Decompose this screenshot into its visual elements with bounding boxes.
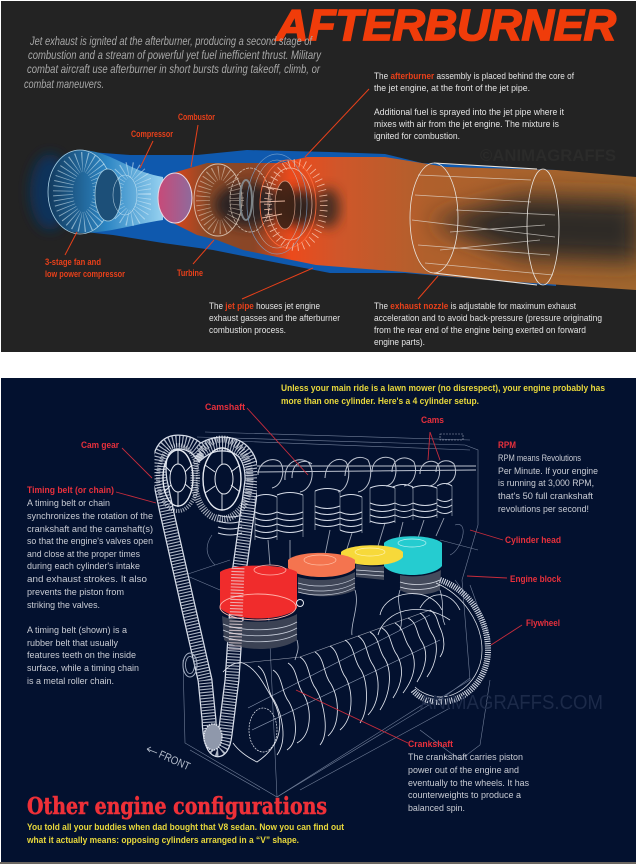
- callout: RPM: that's 50 full crankshaft: [498, 491, 593, 502]
- callout: exhaust nozzle: engine parts).: [374, 337, 425, 348]
- callout: RPM: RPM means Revolutions: [498, 453, 581, 464]
- callout: timing belt: [27, 485, 156, 687]
- cyan piston: [384, 536, 442, 594]
- camshaft: [257, 457, 476, 492]
- closing text: what it actually means: opposing cylinders arranged in a “V” shape.: [26, 835, 299, 846]
- label: cylinder head: [470, 530, 561, 546]
- callout: timing belt: crankshaft and the camshaft(s): [27, 524, 153, 535]
- engine block wireframe: [183, 432, 490, 797]
- crankshaft: [223, 610, 444, 762]
- lower pulley: [204, 724, 222, 750]
- label: engine block: Engine block: [510, 574, 562, 585]
- callout: timing belt: striking the valves.: [27, 600, 100, 611]
- callout: crankshaft: counterweights to produce a: [408, 790, 522, 801]
- callout: RPM: revolutions per second!: [498, 504, 589, 515]
- watermark: ©ANIMAGRAFFS: [480, 146, 616, 165]
- closing text: You told all your buddies when dad bought that V8 sedan. Now you can find out: [27, 822, 345, 833]
- callout: timing belt: is a metal roller chain.: [27, 676, 114, 687]
- intro text: [281, 383, 605, 407]
- orange piston: [288, 553, 355, 596]
- callout: exhaust nozzle: from the rear end of the engine being exerted on forward: [374, 325, 586, 336]
- blue jet pipe: [85, 150, 556, 286]
- flame: [173, 157, 636, 290]
- callout: exhaust nozzle: [374, 276, 602, 348]
- dark core of exhaust: [430, 196, 636, 262]
- label: camshaft: Camshaft: [205, 402, 246, 413]
- callout: timing belt: prevents the piston from: [27, 587, 124, 598]
- cam lobes: [258, 457, 456, 492]
- label: cylinder head: Cylinder head: [505, 535, 561, 546]
- panel: afterburner: [1, 1, 636, 352]
- callout: timing belt: A timing belt (shown) is a: [27, 625, 128, 636]
- label: flywheel: Flywheel: [526, 618, 560, 629]
- label: cam gear: [81, 440, 152, 478]
- intro text: combat aircraft use afterburner in short bursts during takeoff, climb, or: [27, 62, 321, 76]
- intro text: more than one cylinder. Here's a 4 cylinder setup.: [281, 396, 479, 407]
- label: cams: [421, 415, 444, 460]
- cam gears: [158, 439, 250, 519]
- callout: timing belt: A timing belt or chain: [27, 498, 110, 509]
- label: compressor: Compressor: [131, 129, 173, 139]
- callout: jet pipe: [209, 268, 340, 336]
- label: fan: 3-stage fan and: [45, 257, 101, 267]
- callout: exhaust nozzle: acceleration and to avoid back-pressure (pressure originating: [374, 313, 602, 324]
- intro text: combustion and a stream of powerful yet fuel inefficient thrust. Military: [28, 48, 322, 62]
- red piston: [220, 565, 304, 650]
- callout: jet pipe: The jet pipe houses jet engine: [209, 301, 320, 312]
- label: engine block: [467, 574, 562, 585]
- label: fan: [45, 232, 125, 279]
- label: combustor: Combustor: [178, 112, 215, 122]
- callout: crankshaft: balanced spin.: [408, 803, 465, 814]
- callout: jet pipe: combustion process.: [209, 325, 286, 336]
- callout: timing belt: and exhaust strokes. It also: [27, 574, 147, 585]
- valve springs: [218, 484, 452, 565]
- callout: RPM: is running at 3,000 RPM,: [498, 478, 594, 489]
- callout: timing belt: features teeth on the inside: [27, 650, 136, 661]
- exhaust glow at intake: [30, 154, 70, 230]
- intro text: [24, 34, 322, 91]
- callout: RPM: Per Minute. If your engine: [498, 466, 598, 477]
- timing belt: [159, 442, 252, 750]
- callout: crankshaft: [296, 690, 529, 814]
- exhaust nozzle wireframe: [410, 163, 559, 285]
- callout: timing belt: so that the engine's valves open: [27, 536, 153, 547]
- label: turbine: [177, 240, 214, 278]
- callout: RPM: [498, 440, 598, 515]
- label: cam gear: Cam gear: [81, 440, 119, 451]
- callout: afterburner: Additional fuel is sprayed into the jet pipe where it: [374, 107, 564, 118]
- front arrow: FRONT: [157, 749, 192, 773]
- label: flywheel: [491, 618, 560, 645]
- fan spokes: [48, 150, 146, 234]
- callout: crankshaft: The crankshaft carries piston: [408, 752, 523, 763]
- callout: afterburner: [305, 71, 574, 157]
- jet engine illustration: [30, 150, 636, 290]
- title: AFTERBURNER: [275, 1, 616, 50]
- watermark: ANIMAGRAFFS.COM: [420, 692, 603, 714]
- callout: jet pipe: exhaust gasses and the afterburner: [209, 313, 340, 324]
- callout: timing belt: synchronizes the rotation of the: [27, 511, 153, 522]
- callout: afterburner: The afterburner assembly is placed behind the core of: [374, 71, 574, 82]
- connecting rods: [295, 590, 450, 660]
- callout: afterburner: the jet engine, at the front of the jet pipe.: [374, 83, 530, 94]
- turbine wireframe: [194, 154, 307, 254]
- callout: crankshaft: eventually to the wheels. It has: [408, 778, 529, 789]
- callout: timing belt: Timing belt (or chain): [27, 485, 114, 496]
- label: turbine: Turbine: [177, 268, 203, 278]
- label: compressor: [131, 129, 173, 168]
- callout: crankshaft: Crankshaft: [408, 739, 454, 750]
- intro text: combat maneuvers.: [24, 77, 104, 91]
- belt passing over piston: [235, 568, 238, 650]
- callout: timing belt: during each cylinder's intake: [27, 561, 140, 572]
- callout: crankshaft: power out of the engine and: [408, 765, 519, 776]
- dark core of turbine: [214, 183, 282, 227]
- panel: engine: [0, 378, 636, 864]
- callout: afterburner: mixes with air from the jet engine. The mixture is: [374, 119, 559, 130]
- callout: timing belt: surface, while a timing chain: [27, 663, 139, 674]
- closing text: [26, 822, 345, 846]
- yellow piston: [341, 545, 403, 580]
- afterburner ring: [260, 160, 324, 248]
- label: fan: low power compressor: [45, 269, 125, 279]
- heading: other engine configurations: Other engine configurations: [27, 793, 327, 820]
- label: combustor: [178, 112, 215, 167]
- callout: exhaust nozzle: The exhaust nozzle is adjustable for maximum exhaust: [374, 301, 576, 312]
- pink disc: [158, 173, 192, 223]
- flywheel: [413, 580, 488, 702]
- callout: RPM: RPM: [498, 440, 516, 451]
- callout: timing belt: and close at the proper times: [27, 549, 140, 560]
- label: camshaft: [205, 402, 308, 475]
- front arrow: [147, 747, 192, 773]
- fan glow: [48, 150, 163, 233]
- label: cams: Cams: [421, 415, 444, 426]
- callout: timing belt: rubber belt that usually: [27, 638, 118, 649]
- intro text: Jet exhaust is ignited at the afterburner, producing a second stage of: [29, 34, 313, 48]
- callout: afterburner: ignited for combustion.: [374, 131, 460, 142]
